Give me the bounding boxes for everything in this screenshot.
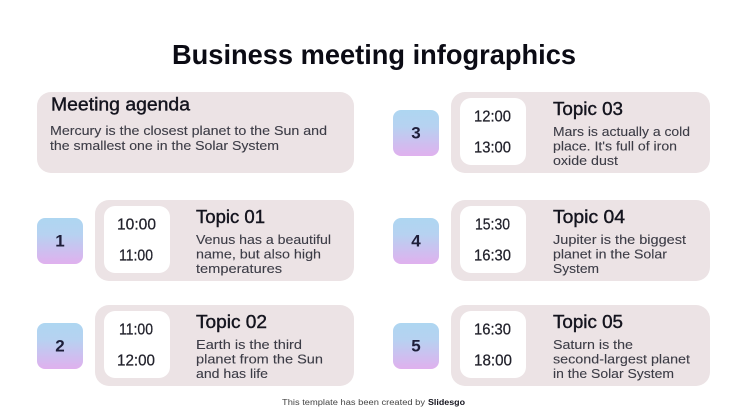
panel: topic 02 [95,305,354,386]
number badge 1: 1 [55,232,65,250]
time box: topic 04: 15:30 [475,216,510,234]
title: Business meeting infographics [172,39,576,70]
footer credit: Slidesgo [428,398,465,407]
time box: topic 05: 18:00 [474,352,512,370]
text: topic 04 description: Jupiter is the biggest [553,232,686,247]
text: topic 05 description: second-largest planet [553,352,690,366]
heading: topic 02: Topic 02 [196,312,267,332]
text: topic 01 description: temperatures [196,261,283,276]
text: topic 02 description: planet from the Sun [196,352,323,366]
text: topic 01 description: Venus has a beautiful [196,232,331,247]
panel: topic 01 [95,200,354,281]
heading: topic 05: Topic 05 [553,312,623,332]
time box: topic 04: 16:30 [474,248,511,264]
time box: topic 01: 11:00 [119,248,153,264]
number badge 4: 4 [411,232,421,250]
panel: topic 05 [451,305,710,386]
text: topic 04 description: planet in the Solar [553,246,668,262]
number badge 3 [393,110,439,156]
text: topic 01 description: name, but also high [196,246,321,262]
heading: topic 01: Topic 01 [196,207,265,227]
text: topic 02 description [196,337,323,381]
time box: topic 01 [104,206,170,273]
text: topic 01 description [196,232,331,276]
panel: meeting agenda [37,92,354,173]
time box: topic 02: 12:00 [117,352,155,370]
time box: topic 03: 12:00 [474,108,511,126]
heading: meeting agenda: Meeting agenda [51,94,191,114]
text: agenda description: the smallest one in the Solar System [50,138,279,153]
footer credit [282,398,465,407]
number badge 2: 2 [55,336,65,356]
time box: topic 04 [460,206,526,273]
text: topic 03 description: Mars is actually a cold [553,124,690,139]
time box: topic 03: 13:00 [474,140,511,156]
number badge 5 [393,323,439,369]
text: topic 03 description [553,124,690,168]
heading: topic 04: Topic 04 [553,207,625,227]
time box: topic 02: 11:00 [119,322,153,338]
number badge 2 [37,323,83,369]
number badge 5: 5 [411,336,421,356]
time box: topic 01: 10:00 [117,216,156,234]
time box: topic 05 [460,311,526,378]
text: topic 03 description: oxide dust [553,153,618,168]
text: topic 05 description: Saturn is the [553,337,633,352]
time box: topic 05: 16:30 [474,322,511,338]
text: topic 05 description [553,337,690,381]
time box: topic 02 [104,311,170,378]
panel: topic 03 [451,92,710,173]
text: topic 05 description: in the Solar System [553,366,674,381]
text: topic 02 description: Earth is the third [196,337,302,352]
panel: topic 04 [451,200,710,281]
heading: topic 03: Topic 03 [553,99,623,119]
text: topic 02 description: and has life [196,366,268,381]
number badge 4 [393,218,439,264]
text: agenda description [50,123,327,153]
time box: topic 03 [460,98,526,165]
number badge 3: 3 [411,124,421,142]
text: topic 04 description [553,232,686,276]
text: agenda description: Mercury is the closest planet to the Sun and [50,123,327,138]
footer credit: This template has been created by [282,398,425,407]
number badge 1 [37,218,83,264]
text: topic 04 description: System [553,261,599,276]
text: topic 03 description: place. It's full of iron [553,138,677,154]
